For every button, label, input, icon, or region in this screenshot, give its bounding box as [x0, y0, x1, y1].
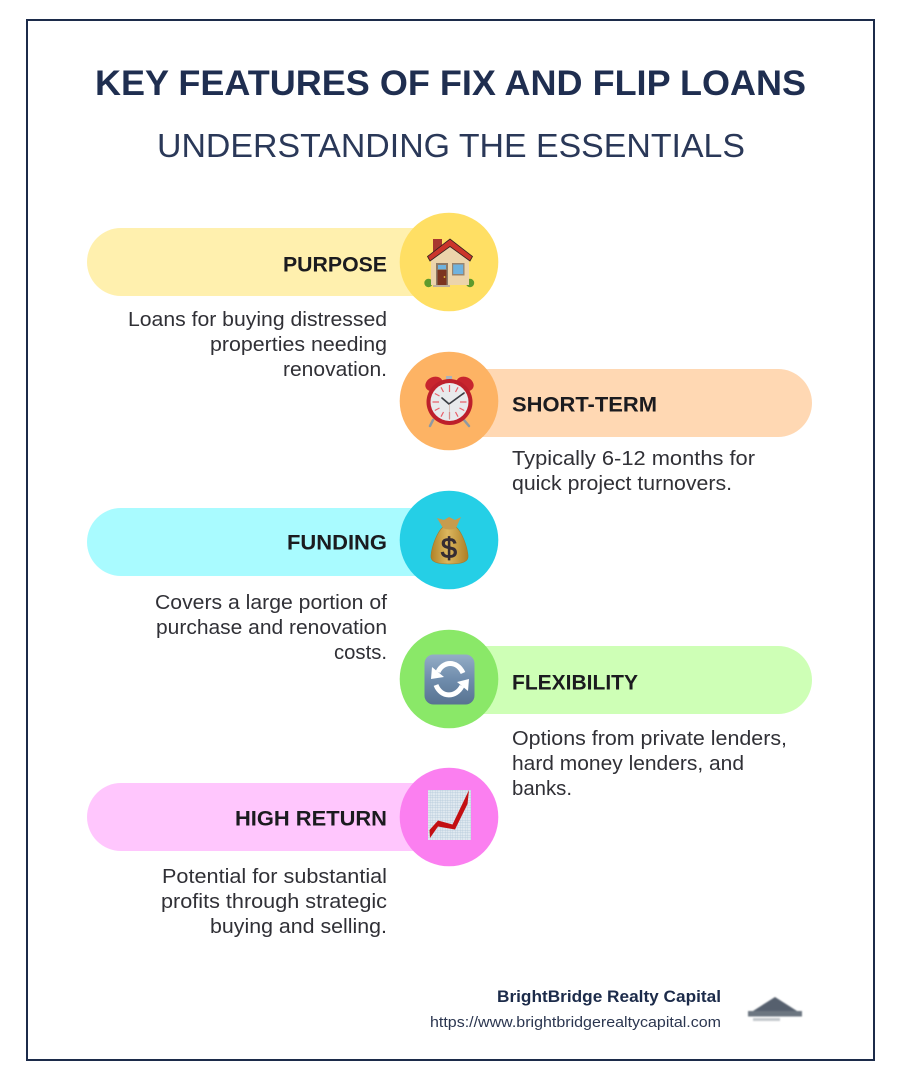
icon: house [424, 239, 474, 287]
panel: flexibility [400, 630, 812, 800]
icon: money bag [431, 517, 468, 565]
high return description: profits through strategic [161, 891, 387, 913]
short-term pill [449, 369, 812, 437]
panel: short-term [400, 352, 812, 495]
panel: purpose [87, 213, 498, 381]
flexibility circle [400, 630, 498, 728]
flexibility description [512, 728, 787, 800]
flexibility description: banks. [512, 778, 572, 800]
company logo [748, 997, 802, 1021]
short-term heading: SHORT-TERM [512, 394, 657, 416]
flexibility heading: FLEXIBILITY [512, 672, 638, 694]
high return circle [400, 768, 498, 866]
purpose description [128, 309, 387, 381]
website url: https://www.brightbridgerealtycapital.com [430, 1014, 721, 1031]
subtitle: UNDERSTANDING THE ESSENTIALS [157, 127, 745, 164]
high return description: Potential for substantial [162, 866, 387, 888]
flexibility description: hard money lenders, and [512, 753, 744, 775]
panel: high return [87, 768, 498, 938]
flexibility pill [449, 646, 812, 714]
high return description [161, 866, 387, 938]
short-term circle [400, 352, 498, 450]
panel: funding [87, 491, 498, 664]
icon: alarm clock [423, 374, 476, 426]
icon: money bag: $ [441, 533, 457, 565]
funding circle [400, 491, 498, 589]
purpose description: Loans for buying distressed [128, 309, 387, 331]
funding description: costs. [334, 642, 387, 664]
purpose pill [87, 228, 449, 296]
purpose description: renovation. [283, 359, 387, 381]
funding description: Covers a large portion of [155, 592, 387, 614]
short-term description: quick project turnovers. [512, 473, 732, 495]
icon: chart [428, 790, 471, 840]
purpose description: properties needing [210, 334, 387, 356]
company name: BrightBridge Realty Capital [497, 987, 721, 1006]
funding description [155, 592, 387, 664]
purpose heading: PURPOSE [283, 254, 387, 276]
short-term description: Typically 6-12 months for [512, 448, 755, 470]
purpose circle [400, 213, 498, 311]
high return heading: HIGH RETURN [235, 808, 387, 830]
title: KEY FEATURES OF FIX AND FLIP LOANS [95, 64, 806, 103]
funding description: purchase and renovation [156, 617, 387, 639]
icon: refresh arrows [424, 654, 474, 704]
high return description: buying and selling. [210, 916, 387, 938]
funding pill [87, 508, 449, 576]
short-term description [512, 448, 755, 495]
funding heading: FUNDING [287, 532, 387, 554]
flexibility description: Options from private lenders, [512, 728, 787, 750]
footer [430, 987, 802, 1031]
high return pill [87, 783, 449, 851]
